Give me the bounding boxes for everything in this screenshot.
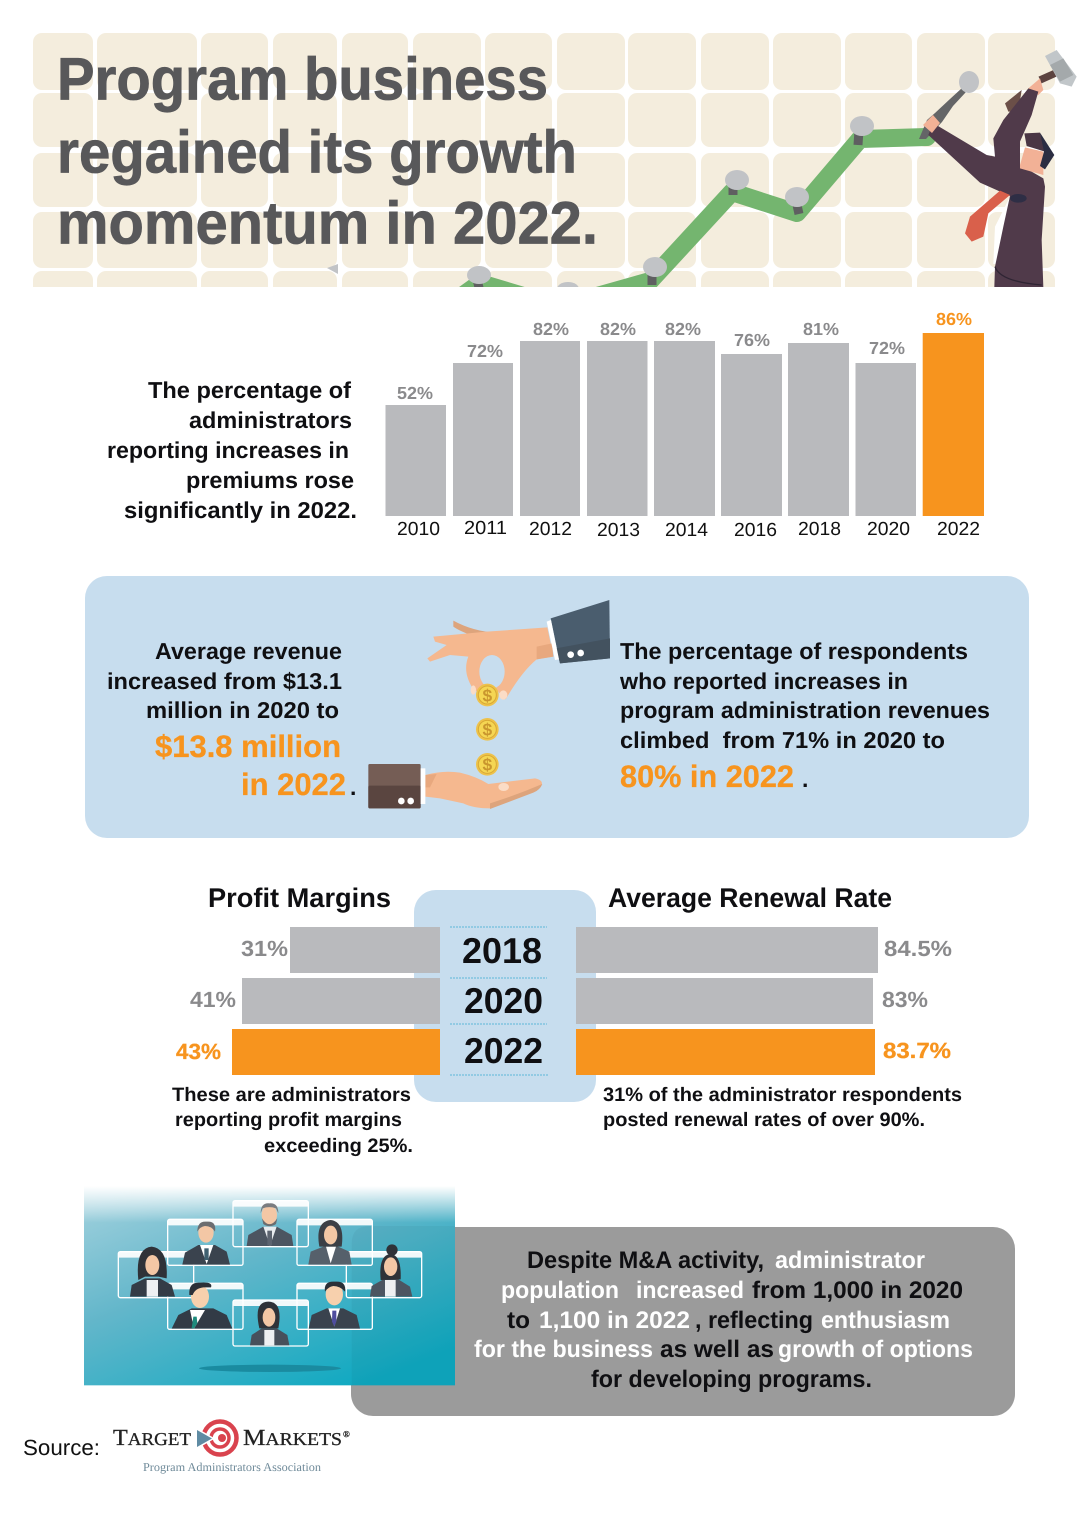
year labels: 2018 bbox=[798, 519, 841, 540]
icon: target bbox=[195, 1422, 236, 1454]
revenue text right: . bbox=[802, 766, 808, 792]
revenue text left: increased from $13.1 bbox=[107, 668, 342, 694]
revenue text right: program administration revenues bbox=[620, 697, 990, 723]
bar chart: premium increases by year bbox=[386, 309, 984, 541]
chart: average renewal rate bbox=[576, 883, 962, 1131]
year labels: 2016 bbox=[734, 520, 777, 541]
values: 84.5% bbox=[884, 936, 952, 961]
population text: administrator bbox=[775, 1247, 925, 1274]
panel: administrator population bbox=[84, 1186, 1015, 1416]
logo: Target Markets: MARKETS bbox=[243, 1425, 342, 1450]
revenue text left: Average revenue bbox=[155, 638, 342, 664]
values: 83.7% bbox=[883, 1038, 951, 1063]
population text: to bbox=[507, 1307, 530, 1334]
panel: header illustration bbox=[33, 33, 1077, 311]
percentage labels: 82% bbox=[533, 319, 569, 339]
year labels bbox=[397, 518, 980, 541]
year labels: 2020 bbox=[867, 519, 910, 540]
title: momentum in 2022. bbox=[57, 190, 598, 256]
coins bbox=[476, 684, 499, 776]
revenue text right: who reported increases in bbox=[619, 668, 908, 694]
heading: Profit Margins bbox=[208, 883, 391, 913]
upper hand bbox=[427, 600, 610, 700]
population text: as well as bbox=[660, 1336, 774, 1363]
text block: premiums description bbox=[107, 377, 357, 523]
bars bbox=[576, 927, 878, 1075]
values: 83% bbox=[882, 987, 928, 1012]
year labels: 2020 bbox=[464, 980, 543, 1021]
note: exceeding 25%. bbox=[264, 1135, 413, 1157]
left hand on chisel bbox=[923, 115, 940, 133]
population text: for developing programs. bbox=[591, 1366, 872, 1393]
tile wall background bbox=[33, 33, 1055, 311]
year labels: 2011 bbox=[464, 518, 507, 539]
values: 41% bbox=[190, 987, 236, 1012]
text block: premiums description: reporting increases in bbox=[107, 437, 349, 463]
heading: Average Renewal Rate bbox=[608, 883, 892, 913]
title: Program business bbox=[57, 46, 548, 112]
population text: 1,100 in 2022 bbox=[539, 1307, 690, 1334]
businessman with hammer bbox=[928, 50, 1077, 287]
revenue text left: million in 2020 to bbox=[146, 697, 339, 723]
logo: Target Markets: Program Administrators Association bbox=[143, 1460, 321, 1474]
window title bars bbox=[118, 1201, 422, 1306]
population text: enthusiasm bbox=[821, 1307, 950, 1334]
coins: $ bbox=[483, 755, 492, 775]
revenue text right: 80% in 2022 bbox=[620, 759, 794, 794]
year labels: 2018 bbox=[462, 930, 542, 971]
percentage labels: 76% bbox=[734, 330, 770, 350]
year labels: 2013 bbox=[597, 520, 640, 541]
population text: , reflecting bbox=[695, 1307, 813, 1334]
illustration: video conference bbox=[84, 1186, 455, 1385]
year labels: 2012 bbox=[529, 519, 572, 540]
values: 31% bbox=[241, 936, 288, 961]
coins: $ bbox=[483, 686, 492, 705]
note: 31% of the administrator respondents bbox=[603, 1084, 962, 1106]
population text: from 1,000 in 2020 bbox=[752, 1277, 963, 1304]
revenue text right: climbed from 71% in 2020 to bbox=[620, 727, 945, 753]
panel: revenue bbox=[85, 576, 1029, 838]
year labels: 2010 bbox=[397, 519, 440, 540]
population text: for the business bbox=[474, 1336, 653, 1363]
note: posted renewal rates of over 90%. bbox=[603, 1109, 925, 1131]
percentage labels: 82% bbox=[665, 319, 701, 339]
small nail fragment bbox=[327, 264, 338, 274]
revenue text left: . bbox=[350, 774, 356, 800]
revenue text right: The percentage of respondents bbox=[620, 638, 968, 664]
population text: growth of options bbox=[778, 1336, 973, 1363]
revenue text left bbox=[107, 638, 356, 802]
logo: Target Markets bbox=[113, 1422, 350, 1474]
revenue text left: $13.8 million bbox=[155, 729, 341, 764]
percentage labels: 86% bbox=[936, 309, 972, 329]
note: These are administrators bbox=[172, 1084, 411, 1106]
values bbox=[176, 936, 288, 1064]
bars bbox=[232, 927, 440, 1075]
values: 43% bbox=[176, 1039, 221, 1064]
chart: profit margins bbox=[172, 883, 440, 1157]
lower hand bbox=[368, 764, 542, 809]
year labels: 2014 bbox=[665, 520, 708, 541]
percentage labels bbox=[397, 309, 972, 403]
coins: $ bbox=[483, 720, 492, 740]
population text: increased bbox=[636, 1277, 744, 1304]
population text: population bbox=[501, 1277, 619, 1304]
note bbox=[172, 1084, 413, 1157]
year labels: 2022 bbox=[937, 519, 980, 540]
green growth line bbox=[462, 137, 927, 298]
people bbox=[130, 1203, 412, 1345]
text block: premiums description: The percentage of bbox=[148, 377, 351, 403]
percentage labels: 52% bbox=[397, 383, 433, 403]
percentage labels: 82% bbox=[600, 319, 636, 339]
population text: Despite M&A activity, bbox=[527, 1247, 764, 1274]
revenue text left: in 2022 bbox=[241, 767, 346, 802]
text block: premiums description: premiums rose bbox=[186, 467, 354, 493]
note: reporting profit margins bbox=[175, 1109, 402, 1131]
title bbox=[57, 46, 598, 256]
text block: premiums description: administrators bbox=[189, 407, 352, 433]
nails on the line bbox=[467, 116, 874, 296]
panel: year column bbox=[414, 890, 596, 1102]
percentage labels: 72% bbox=[467, 341, 503, 361]
source label: Source: bbox=[23, 1435, 100, 1460]
icon: hands passing coins bbox=[368, 600, 610, 809]
revenue text right bbox=[619, 638, 990, 794]
year labels: 2022 bbox=[464, 1030, 543, 1071]
percentage labels: 81% bbox=[803, 319, 839, 339]
chisel bbox=[919, 71, 979, 139]
note bbox=[603, 1084, 962, 1131]
percentage labels: 72% bbox=[869, 338, 905, 358]
values bbox=[882, 936, 952, 1063]
title: regained its growth bbox=[57, 118, 577, 186]
bars bbox=[386, 333, 984, 516]
logo: Target Markets: TARGET bbox=[113, 1425, 191, 1450]
video windows bbox=[118, 1201, 422, 1346]
population text bbox=[474, 1247, 973, 1393]
logo: Target Markets: ® bbox=[343, 1429, 350, 1439]
year labels bbox=[462, 930, 543, 1071]
text block: premiums description: significantly in 2022. bbox=[124, 497, 357, 523]
